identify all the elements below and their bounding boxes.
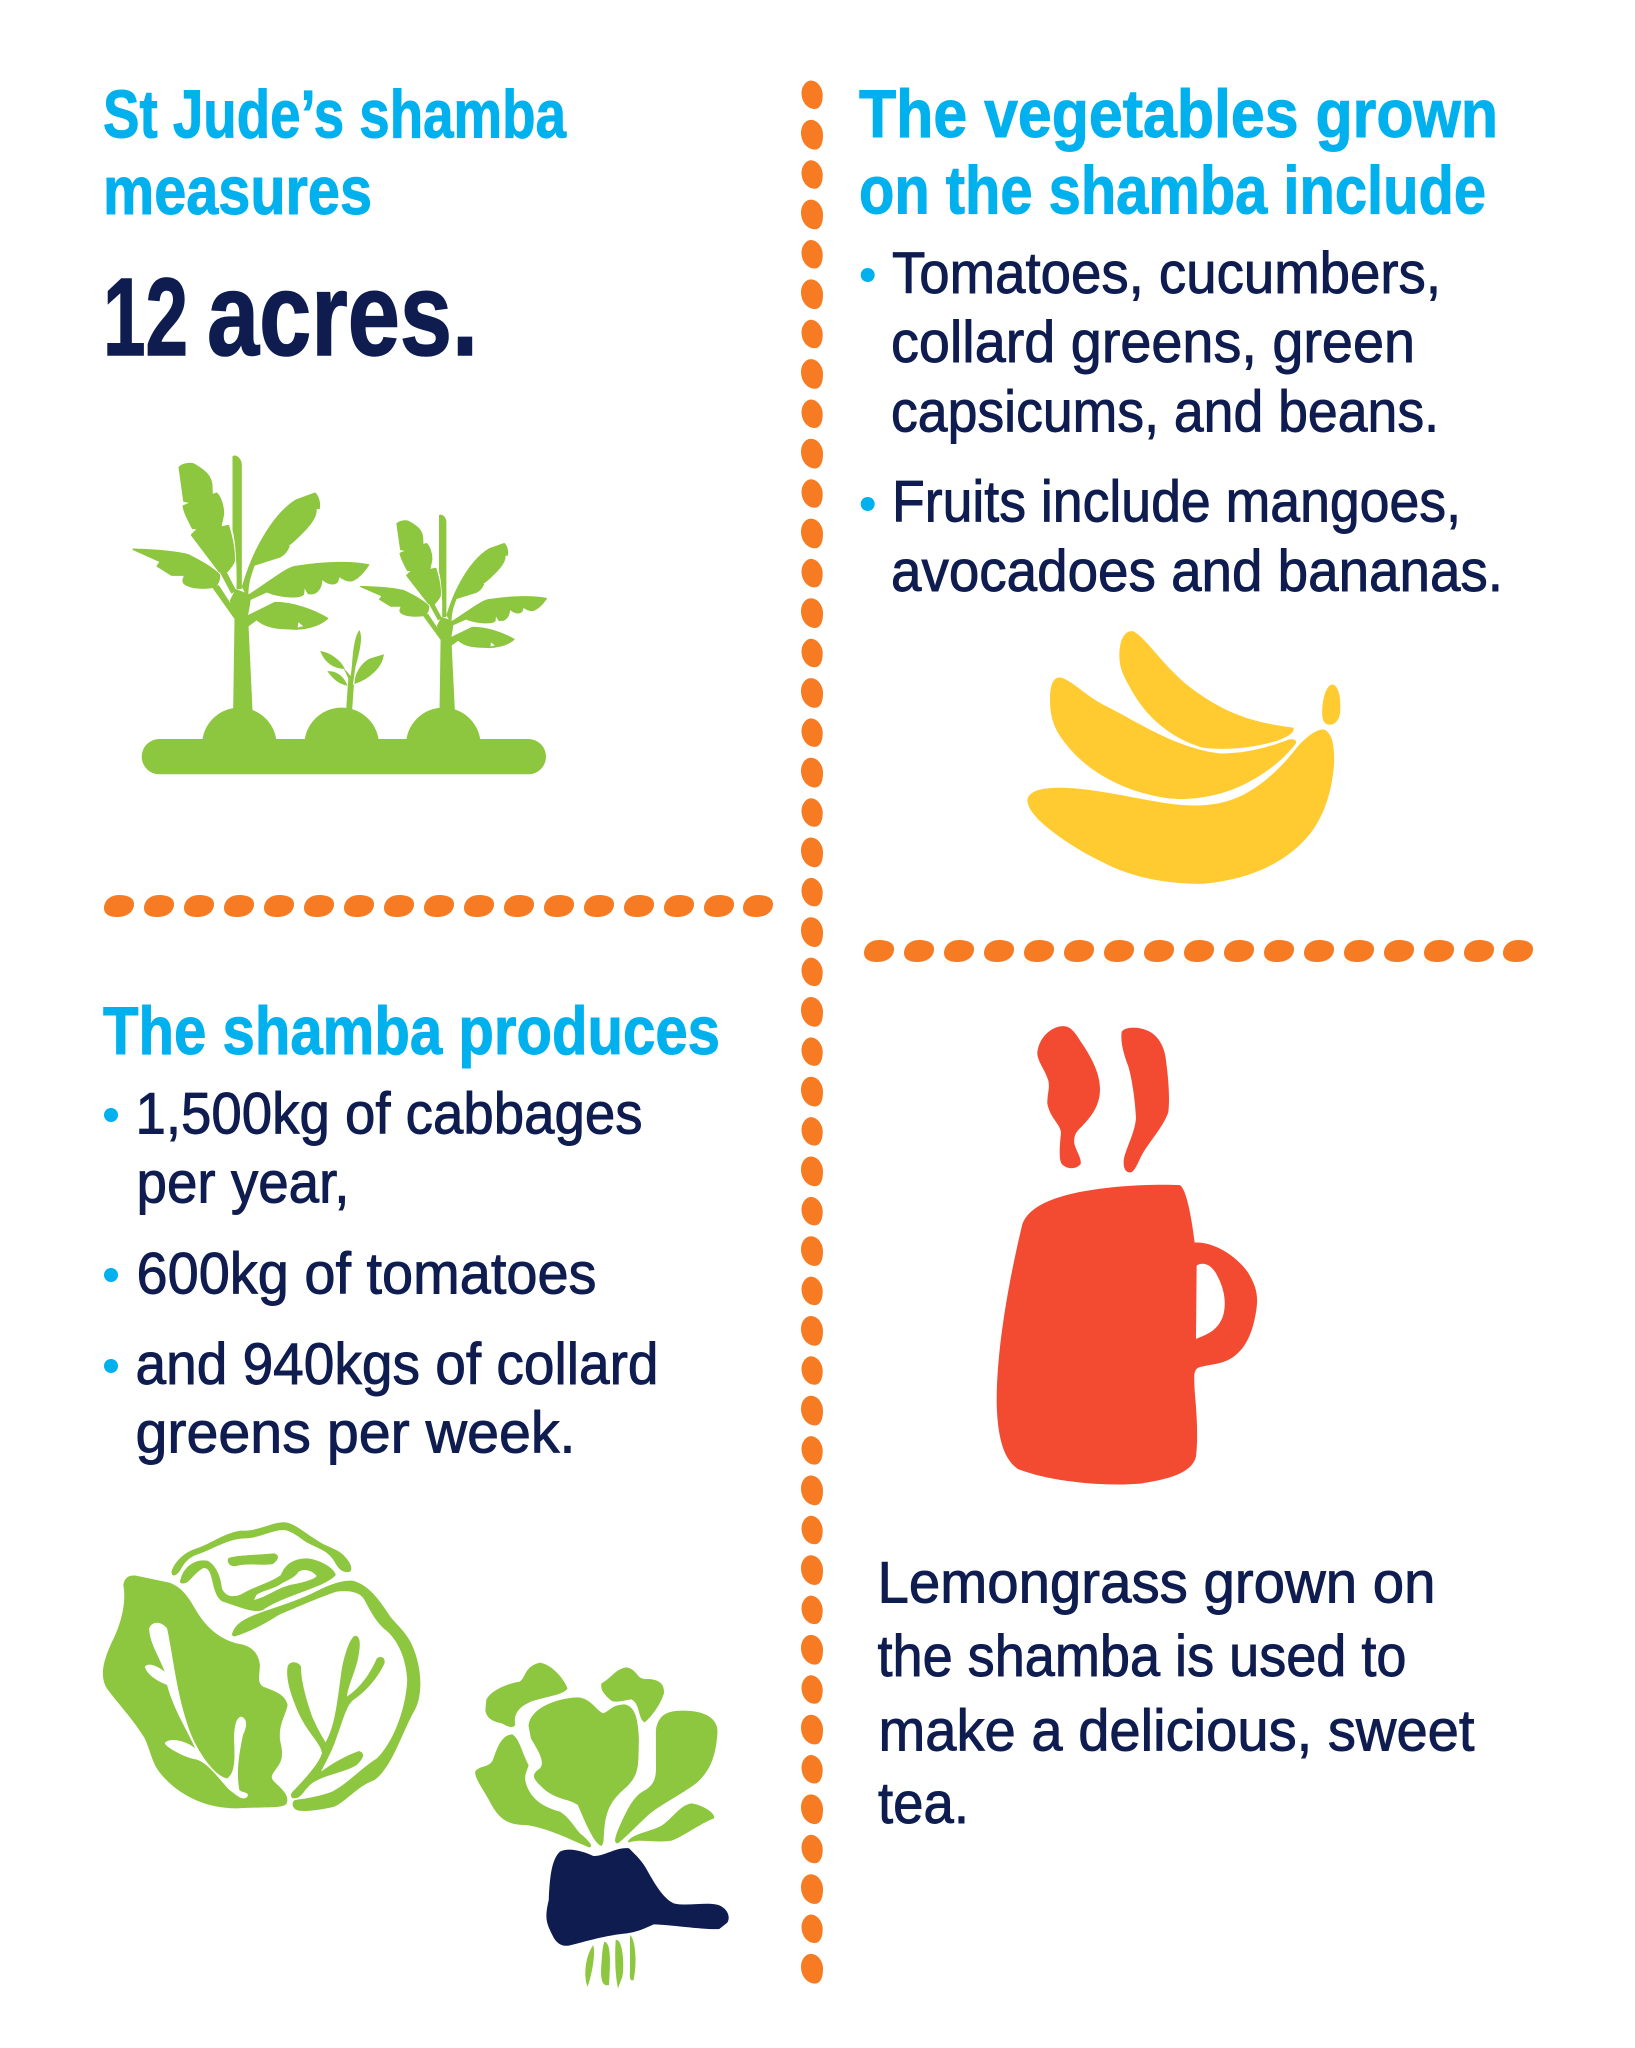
bullet list: produce quantities: 1,500kg of cabbages [136, 1081, 642, 1146]
bullet list: vegetables and fruits: collard greens, green [891, 310, 1415, 375]
text block: lemongrass tea: Lemongrass grown on [878, 1551, 1436, 1616]
bullet list: vegetables and fruits: capsicums, and beans. [891, 379, 1439, 444]
icon: cabbage [103, 1522, 420, 1811]
heading: The vegetables grown on the shamba include: The vegetables grown [859, 76, 1498, 152]
panel: vegetables and fruits [859, 76, 1503, 884]
text block: lemongrass tea: make a delicious, sweet [878, 1699, 1474, 1764]
heading: The vegetables grown on the shamba include [859, 76, 1498, 229]
bullet list: vegetables and fruits: avocadoes and bananas. [891, 539, 1503, 604]
big figure: 12 acres: acres. [207, 249, 478, 381]
big figure: 12 acres [103, 249, 478, 381]
icon: banana bunch [1027, 631, 1340, 884]
text block: lemongrass tea: the shamba is used to [878, 1624, 1406, 1689]
panel: lemongrass tea [878, 1026, 1474, 1836]
heading: St Jude's shamba measures: St Jude’s shamba [103, 76, 567, 152]
icon: steaming mug [997, 1026, 1257, 1484]
bullet list: vegetables and fruits: Tomatoes, cucumbers, [892, 241, 1441, 306]
bullet list: produce quantities: 600kg of tomatoes [136, 1241, 596, 1306]
text block: lemongrass tea: tea. [878, 1771, 969, 1836]
heading: St Jude's shamba measures: measures [103, 153, 372, 229]
bullet list: produce quantities: greens per week. [136, 1401, 576, 1466]
bullet list: vegetables and fruits: Fruits include mangoes, [892, 469, 1461, 534]
heading: St Jude's shamba measures [103, 76, 567, 229]
panel: shamba size [103, 76, 567, 774]
text block: lemongrass tea [878, 1551, 1474, 1836]
bullet list: vegetables and fruits [861, 241, 1503, 604]
bullet list: produce quantities: per year, [136, 1151, 350, 1216]
bullet list: produce quantities [104, 1081, 658, 1466]
bullet list: produce quantities: and 940kgs of collard [136, 1332, 658, 1397]
panel: shamba produce [103, 993, 729, 1988]
heading: The shamba produces: The shamba produces [103, 993, 720, 1069]
icon: collard greens bunch [475, 1663, 729, 1988]
icon: banana plants on mounds [133, 456, 546, 774]
big figure: 12 acres: 12 [103, 256, 188, 379]
heading: The vegetables grown on the shamba include: on the shamba include [859, 153, 1486, 229]
